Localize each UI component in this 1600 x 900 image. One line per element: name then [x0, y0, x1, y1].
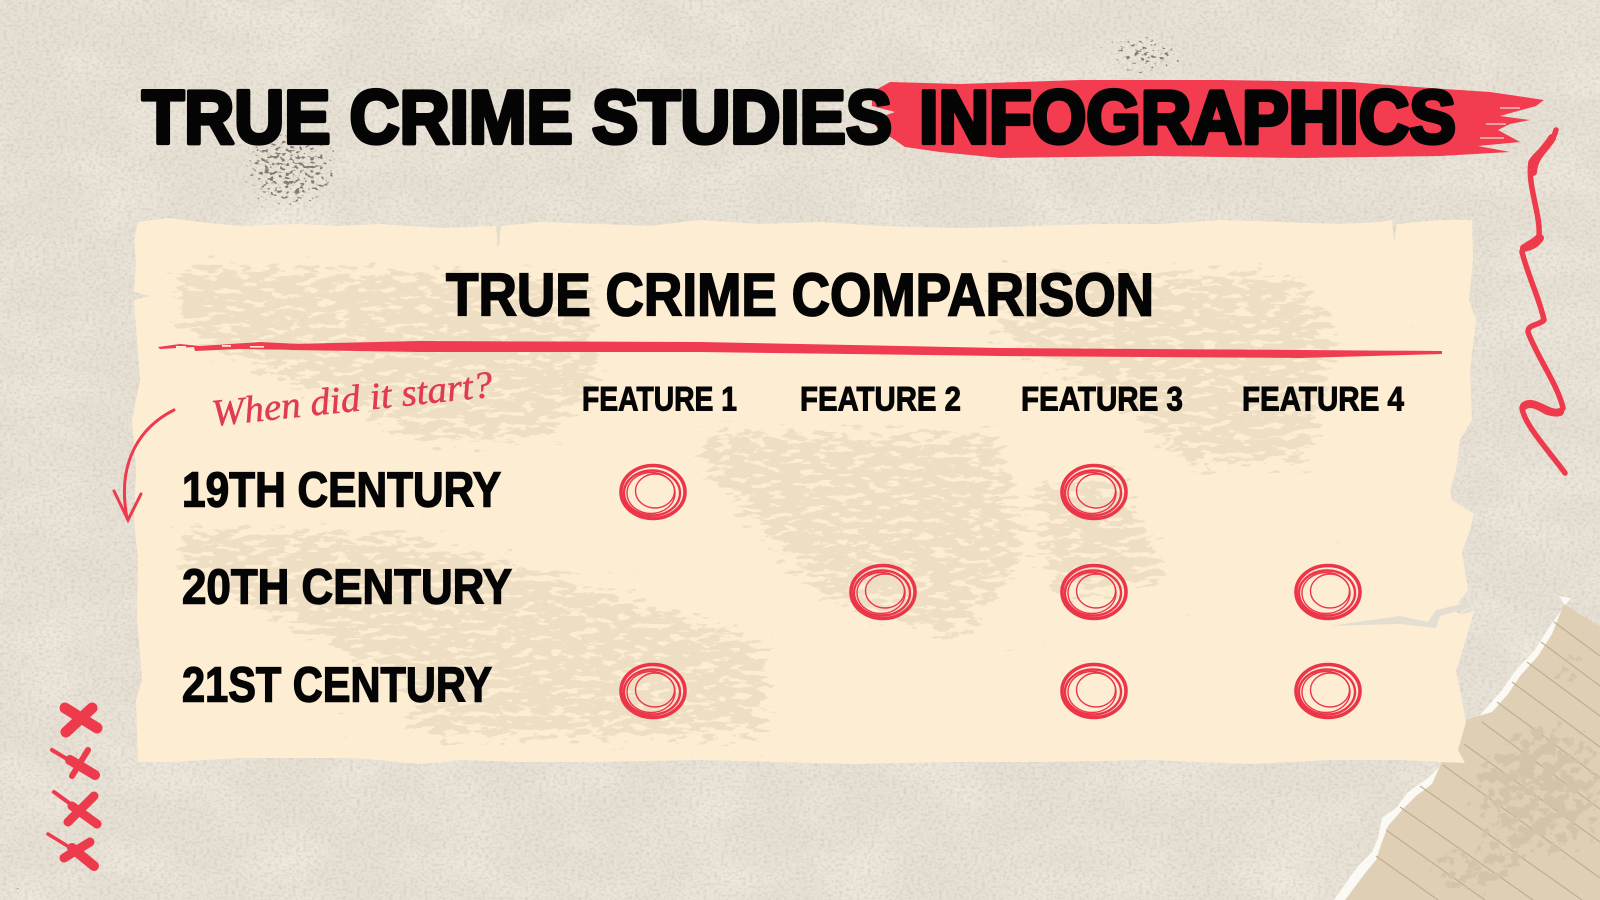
column headers: FEATURE 2 — [800, 380, 961, 418]
marks: 20th century feature 4 — [1296, 566, 1360, 618]
column headers: FEATURE 3 — [1021, 380, 1183, 418]
title: TRUE CRIME STUDIES — [142, 75, 892, 159]
panel stains — [172, 262, 1340, 740]
column headers: FEATURE 1 — [582, 380, 737, 418]
title: INFOGRAPHICS — [919, 75, 1456, 159]
title brush stroke — [872, 80, 1544, 158]
title — [142, 75, 1456, 159]
arrow: pointing to rows — [114, 410, 174, 520]
crosses: bottom left — [48, 708, 97, 866]
scribble line: right — [1522, 130, 1565, 473]
panel: torn cream paper — [132, 218, 1476, 764]
heading underline — [158, 341, 1442, 358]
row labels: 19TH CENTURY — [182, 464, 501, 518]
row labels: 20TH CENTURY — [182, 560, 512, 614]
marks: 21st century feature 3 — [1062, 664, 1126, 718]
notebook paper corner — [1334, 596, 1600, 900]
marks: 20th century feature 2 — [851, 566, 915, 618]
marks: 20th century feature 3 — [1062, 566, 1126, 618]
marks: 21st century feature 1 — [621, 664, 685, 718]
column headers — [582, 380, 1404, 418]
row labels — [182, 464, 512, 712]
row labels: 21ST CENTURY — [182, 658, 492, 712]
marks: 19th century feature 3 — [1062, 466, 1126, 518]
marks: 21st century feature 4 — [1296, 664, 1360, 718]
marks: 19th century feature 1 — [621, 466, 685, 518]
column headers: FEATURE 4 — [1242, 380, 1404, 418]
handwritten note: When did it start? — [210, 364, 494, 435]
background grunge specks — [6, 0, 1233, 894]
section heading: TRUE CRIME COMPARISON — [446, 262, 1154, 328]
